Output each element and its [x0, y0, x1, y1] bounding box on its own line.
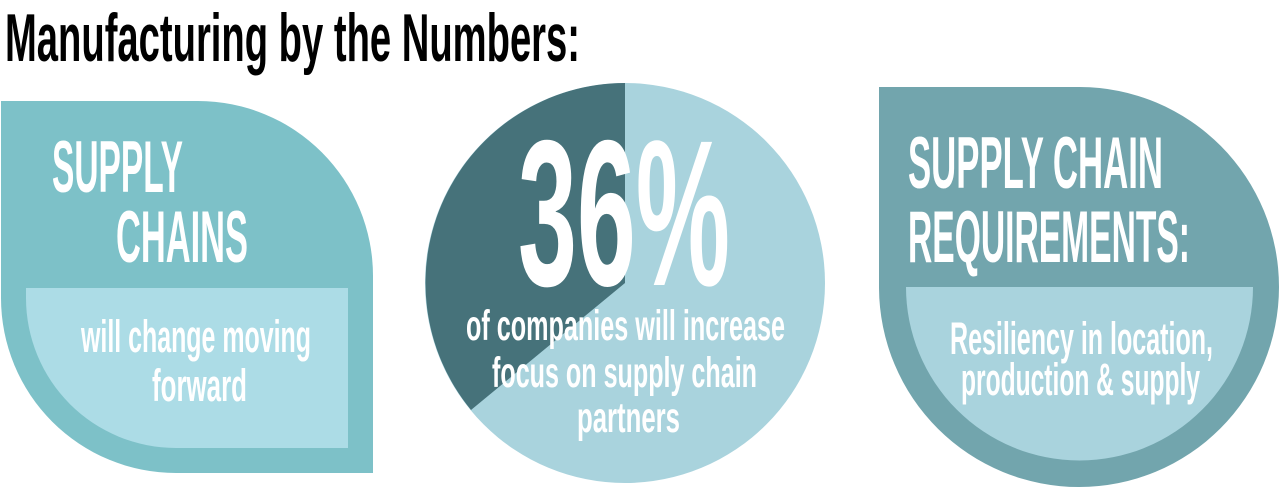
text: will change moving forward: forward — [152, 360, 247, 411]
panel: supply chains: CHAINS — [116, 197, 248, 278]
text: resiliency — [950, 313, 1213, 405]
text: will change moving forward: will change moving — [80, 311, 311, 362]
panel: pie chart 36% — [425, 83, 825, 483]
title: Manufacturing by the Numbers: — [5, 0, 580, 76]
heading: supply chains: SUPPLY — [52, 127, 183, 208]
text: caption: focus on supply chain — [492, 349, 757, 397]
inner box — [26, 288, 348, 448]
pie slice 36% — [426, 83, 625, 410]
panel: supply chains — [1, 101, 373, 473]
panel: supply chain requirements — [879, 87, 1279, 487]
big number: 36% — [518, 98, 730, 330]
text: caption — [466, 302, 785, 442]
text: caption: of companies will increase — [466, 302, 785, 350]
text: caption: partners — [577, 394, 680, 442]
heading: supply chains — [52, 127, 248, 278]
heading — [908, 123, 1190, 278]
inner half circle — [906, 287, 1253, 460]
text: will change moving forward — [80, 311, 311, 411]
